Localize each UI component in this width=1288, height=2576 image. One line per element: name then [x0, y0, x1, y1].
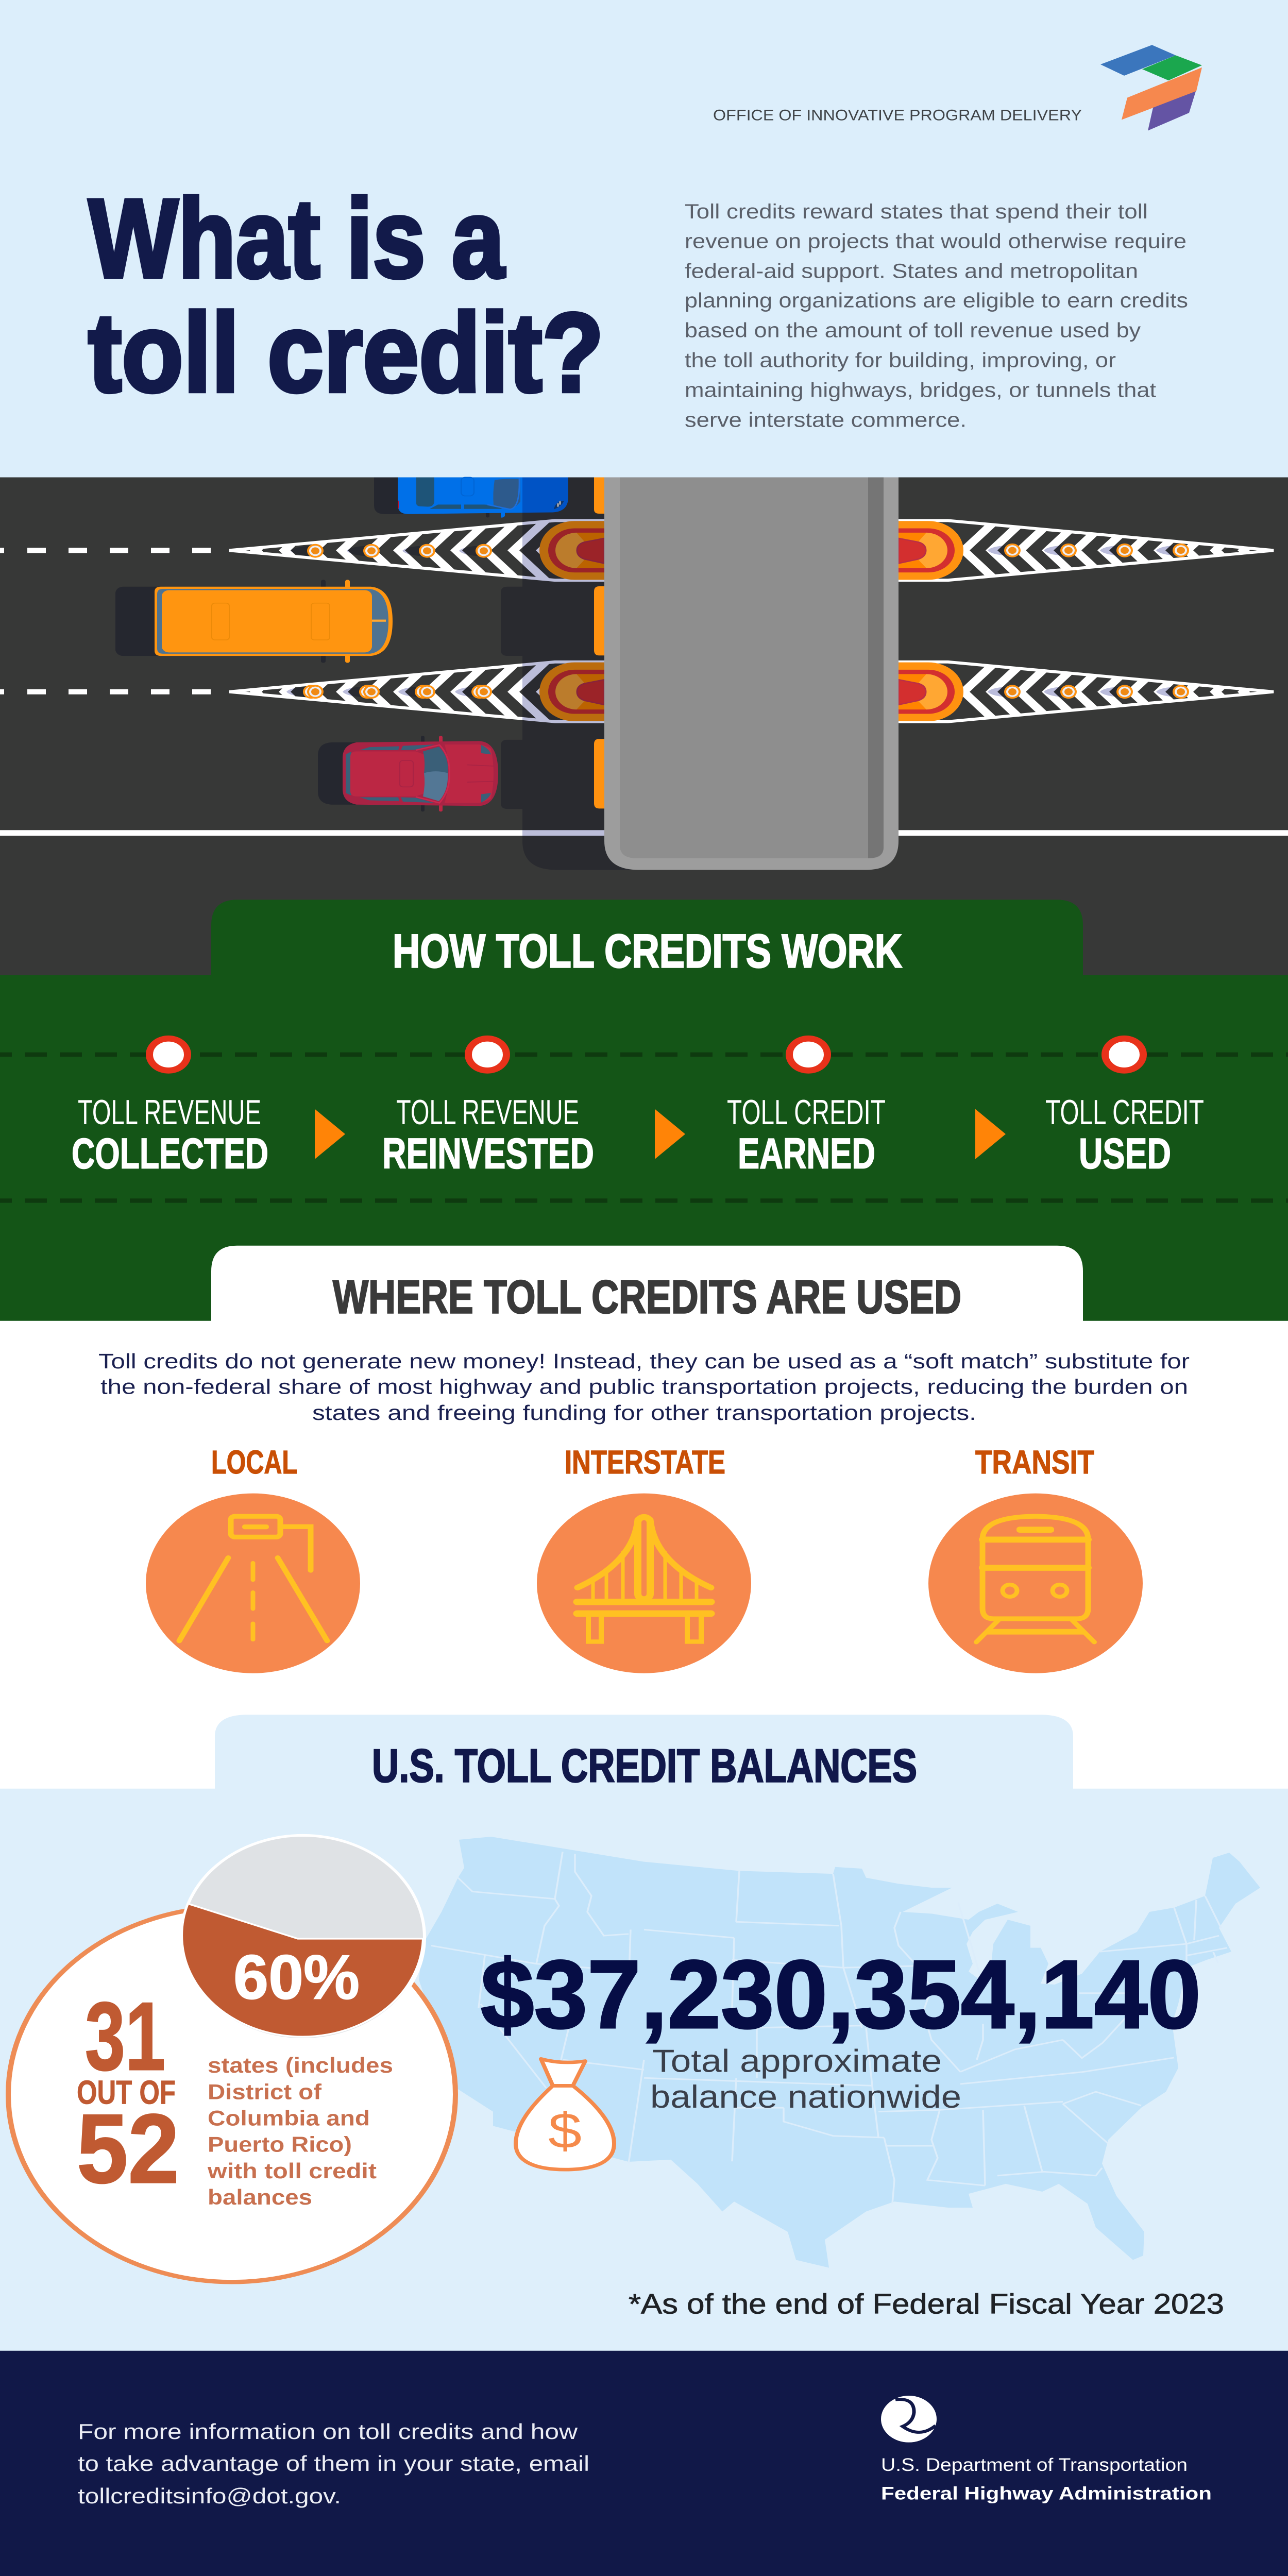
marker shadows [286, 545, 1181, 698]
agency name: Federal Highway Administration [881, 2484, 1212, 2504]
intro text block: federal-aid support. States and metropolitan [685, 260, 1138, 283]
pie chart: 60%: 60% [233, 1943, 360, 2012]
big numbers: 31 [85, 1982, 165, 2090]
contact text: For more information on toll credits and how [78, 2419, 578, 2444]
panel: where toll credits are used [0, 1246, 1288, 1790]
step 4: USED [1079, 1130, 1171, 1178]
road edge line [0, 830, 1288, 836]
footnote: *As of the end of Federal Fiscal Year 2023 [629, 2289, 1224, 2319]
stat description: District of [208, 2079, 322, 2104]
pie chart: 60% [181, 1835, 425, 2040]
car: blue [374, 477, 568, 518]
column labels: TRANSIT [975, 1444, 1094, 1481]
intro text block: Toll credits reward states that spend their toll [685, 200, 1148, 223]
step 4 [1045, 1092, 1204, 1178]
agency name [881, 2455, 1212, 2504]
toll gates: orange bars [594, 477, 604, 808]
title: toll credit? [88, 290, 604, 415]
green band with tab [0, 900, 1288, 1321]
dashed lane lines [0, 1055, 1288, 1200]
total balance caption: balance nationwide [650, 2079, 961, 2115]
title: What is a [89, 176, 505, 301]
step 2: TOLL REVENUE [396, 1092, 579, 1131]
step 3 [727, 1092, 886, 1178]
heading: WHERE TOLL CREDITS ARE USED [333, 1272, 961, 1324]
panel: header background [0, 0, 1288, 478]
step markers [149, 1039, 1143, 1071]
icon: train [928, 1494, 1143, 1673]
step 2 [382, 1092, 594, 1178]
column labels [211, 1444, 1094, 1481]
heading: HOW TOLL CREDITS WORK [393, 925, 902, 977]
panel: road illustration [0, 477, 1288, 979]
explanatory text: Toll credits do not generate new money! Instead, they can be used as a “soft match” substitute for [98, 1349, 1190, 1373]
intro text block: the toll authority for building, improving, or [685, 349, 1116, 372]
explanatory text: the non-federal share of most highway and public transportation projects, reducing the burden on [100, 1375, 1188, 1399]
step 3: EARNED [738, 1130, 875, 1178]
intro text block [685, 200, 1188, 431]
stat circle: 31 out of 52 [8, 1835, 455, 2282]
car: orange van [115, 580, 393, 663]
step 1 [72, 1092, 268, 1178]
big numbers: 52 [77, 2094, 179, 2204]
logo: DOT emblem [881, 2396, 937, 2443]
heading: U.S. TOLL CREDIT BALANCES [372, 1740, 917, 1792]
safety markers [303, 544, 1189, 699]
title [88, 176, 604, 415]
map: United States [419, 1837, 1260, 2268]
step 2: REINVESTED [382, 1130, 594, 1178]
stat description [207, 2053, 393, 2209]
agency name: U.S. Department of Transportation [881, 2455, 1188, 2475]
stat description: balances [208, 2185, 312, 2209]
column labels: INTERSTATE [565, 1444, 725, 1481]
arrow 3 [975, 1109, 1006, 1159]
intro text block: maintaining highways, bridges, or tunnels that [685, 379, 1156, 401]
step 1: TOLL REVENUE [78, 1092, 261, 1131]
contact text [78, 2419, 589, 2508]
icon: bridge [537, 1494, 751, 1673]
office name: OFFICE OF INNOVATIVE PROGRAM DELIVERY [713, 107, 1082, 124]
icon: local road [146, 1494, 360, 1673]
total balance caption [650, 2043, 961, 2115]
panel: how toll credits work [0, 900, 1288, 1321]
car: red [318, 736, 498, 811]
logo: Office of Innovative Program Delivery [1100, 45, 1202, 130]
toll booth shadow [501, 477, 670, 870]
stat description: states (includes [208, 2053, 393, 2077]
intro text block: based on the amount of toll revenue used by [685, 319, 1141, 342]
arrow 1 [315, 1109, 345, 1159]
intro text block: planning organizations are eligible to earn credits [685, 290, 1188, 312]
toll island: top right [899, 516, 1286, 585]
toll island: bottom right [899, 657, 1286, 726]
contact text: tollcreditsinfo@dot.gov. [78, 2484, 341, 2508]
intro text block: revenue on projects that would otherwise require [685, 230, 1187, 253]
panel: U.S. toll credit balances [0, 1715, 1288, 2351]
panel: footer [0, 2351, 1288, 2576]
toll booth roof [604, 477, 899, 870]
icon: money bag [516, 2059, 614, 2170]
contact text: to take advantage of them in your state, email [78, 2451, 589, 2476]
step 1: COLLECTED [72, 1130, 268, 1178]
stat description: with toll credit [207, 2159, 377, 2183]
step 3: TOLL CREDIT [727, 1092, 886, 1131]
toll island: top left [229, 516, 604, 585]
total balance caption: Total approximate [652, 2043, 942, 2079]
intro text block: serve interstate commerce. [685, 409, 967, 431]
arrow 2 [655, 1109, 685, 1159]
stat description: Columbia and [208, 2106, 370, 2130]
stat description: Puerto Rico) [208, 2132, 352, 2157]
explanatory text [98, 1349, 1190, 1425]
toll island: bottom left [229, 657, 604, 726]
icon: money bag: $ [548, 2103, 582, 2159]
lane dashes [0, 548, 211, 694]
column labels: LOCAL [211, 1444, 297, 1481]
big numbers: OUT OF [77, 2074, 176, 2111]
big numbers [77, 1982, 179, 2204]
explanatory text: states and freeing funding for other transportation projects. [312, 1401, 976, 1425]
